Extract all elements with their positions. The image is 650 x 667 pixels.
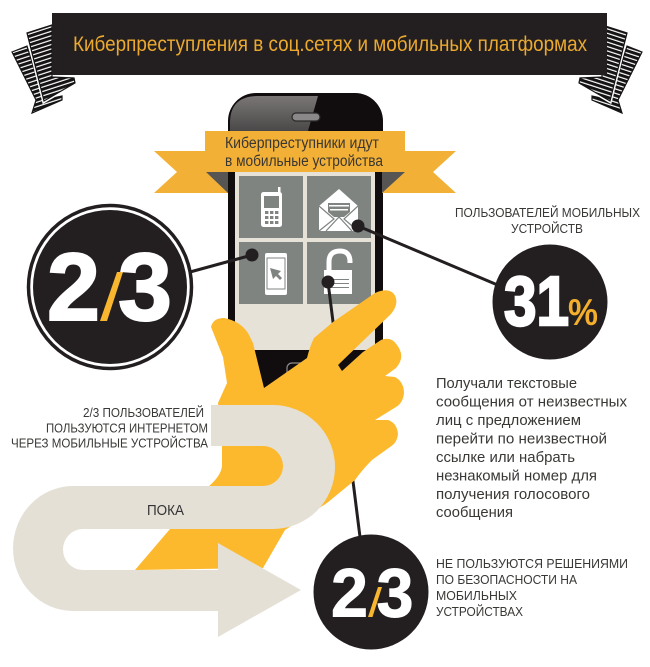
text: description of received messages: перейти по неизвестной [436, 432, 607, 448]
icon: phone with cursor [265, 253, 287, 295]
text: two thirds of users: ПОЛЬЗУЮТСЯ ИНТЕРНЕТОМ [46, 420, 208, 436]
decoration: left striped ribbon tails [12, 25, 75, 113]
stat circle: two thirds small: 3 [376, 554, 414, 632]
app tiles grid [239, 176, 371, 304]
smartphone [228, 93, 383, 403]
phone speaker [292, 113, 320, 121]
text: do not use security solutions: УСТРОЙСТВАХ [436, 604, 523, 619]
stat circle: two thirds large [28, 206, 192, 368]
text: do not use security solutions: НЕ ПОЛЬЗУЮТСЯ РЕШЕНИЯМИ [436, 556, 628, 571]
ribbon: cybercriminals heading [154, 131, 456, 193]
text: description of received messages: лиц с предложением [436, 413, 581, 429]
text: description of received messages: Получали текстовые [436, 376, 577, 392]
text: two thirds of users [11, 405, 208, 450]
icon: mobile phone keypad [261, 187, 282, 227]
text: description of received messages: сообщения от неизвестных [436, 394, 628, 410]
arrow ribbon [13, 405, 335, 637]
stat circle: 31 percent [492, 244, 608, 360]
connector: lock to bottom circle [322, 276, 360, 537]
text: do not use security solutions: МОБИЛЬНЫХ [436, 588, 517, 603]
text: description of received messages: получения голосового [436, 487, 590, 503]
decoration: right striped ribbon tails [579, 25, 642, 113]
connector: envelope to 31 percent circle [352, 220, 500, 286]
stat circle: two thirds large: 2 [47, 234, 100, 341]
text: description of received messages [436, 376, 628, 521]
stat circle: two thirds large: 3 [118, 234, 172, 341]
icon: open padlock [324, 251, 352, 294]
phone glare [230, 96, 318, 131]
title banner [52, 13, 607, 75]
ribbon: cybercriminals heading: Киберпреступники идут [225, 135, 379, 152]
ribbon: cybercriminals heading: в мобильные устройства [225, 153, 383, 170]
icon: open envelope [319, 189, 358, 231]
text: two thirds of users: ЧЕРЕЗ МОБИЛЬНЫЕ УСТРОЙСТВА [11, 436, 208, 450]
connector: big circle to tile [190, 248, 258, 272]
label: while: ПОКА [147, 502, 184, 519]
hand [135, 290, 404, 570]
text: two thirds of users: 2/3 ПОЛЬЗОВАТЕЛЕЙ [83, 405, 204, 420]
text: do not use security solutions: ПО БЕЗОПАСНОСТИ НА [436, 572, 577, 587]
text: mobile users: УСТРОЙСТВ [511, 221, 583, 236]
home button [287, 363, 321, 391]
stat circle: 31 percent: 31 [504, 262, 569, 340]
text: description of received messages: ссылке или набрать [436, 450, 575, 466]
stat circle: 31 percent: % [568, 292, 598, 333]
text: do not use security solutions [436, 556, 628, 619]
stat circle: two thirds small [314, 534, 428, 650]
stat circle: two thirds small: 2 [331, 554, 368, 632]
text: description of received messages: незнакомый номер для [436, 468, 597, 484]
phone screen [235, 165, 375, 350]
text: description of received messages: сообщения [436, 505, 513, 521]
title banner: Киберпреступления в соц.сетях и мобильных платформах [73, 33, 587, 56]
text: mobile users [455, 205, 640, 236]
